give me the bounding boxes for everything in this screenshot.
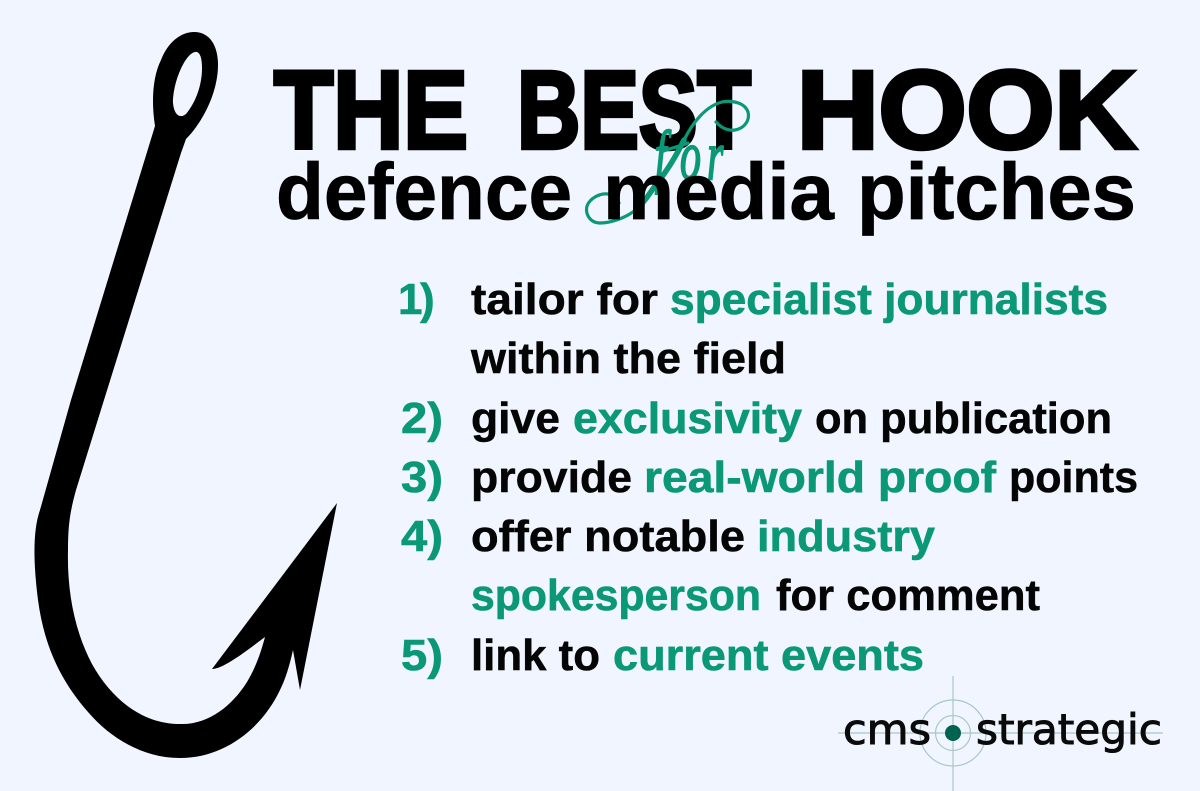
subtitle: defence media pitches: defence <box>276 147 572 236</box>
subtitle: defence media pitches <box>276 147 1136 236</box>
list item 5: link to <box>471 631 600 680</box>
logo: cms strategic <box>838 676 1163 791</box>
script word: for: for <box>655 118 724 195</box>
list item 1: tailor for <box>471 275 658 324</box>
list item 3: 3) <box>401 453 443 502</box>
list item 4: industry <box>757 512 936 561</box>
list item 2: on publication <box>815 394 1112 443</box>
list item 1: 1) <box>398 275 435 324</box>
list item 1: specialist journalists <box>670 275 1108 324</box>
list item 2: exclusivity <box>573 394 803 443</box>
list item 5: 5) <box>401 631 443 680</box>
list item 5 <box>401 631 924 680</box>
list item 2: give <box>471 394 560 443</box>
logo: cms strategic: strategic <box>976 705 1162 754</box>
list item 4: offer notable <box>471 512 745 561</box>
list item 4: spokesperson <box>471 571 761 620</box>
icon: fish hook <box>34 32 337 758</box>
list item 4 <box>401 512 1040 620</box>
list item 3: real-world proof <box>644 453 996 502</box>
logo: cms strategic: cms <box>843 705 931 754</box>
title: THE BEST HOOK <box>274 49 1136 172</box>
list item 2 <box>401 394 1112 443</box>
subtitle: defence media pitches: pitches <box>857 147 1136 236</box>
list item 1 <box>398 275 1108 383</box>
title: THE BEST HOOK: HOOK <box>797 49 1136 172</box>
subtitle: defence media pitches: media <box>603 147 834 236</box>
list item 4: for comment <box>776 571 1040 620</box>
list item 5: current events <box>613 631 924 680</box>
script word: for <box>587 101 748 223</box>
list item 4: 4) <box>401 512 443 561</box>
list item 3 <box>401 453 1138 502</box>
title: THE BEST HOOK: BEST <box>517 49 751 172</box>
list item 2: 2) <box>401 394 443 443</box>
title: THE BEST HOOK: THE <box>274 49 468 172</box>
list item 1: within the field <box>470 334 786 383</box>
list item 3: points <box>1009 453 1138 502</box>
list item 3: provide <box>471 453 632 502</box>
